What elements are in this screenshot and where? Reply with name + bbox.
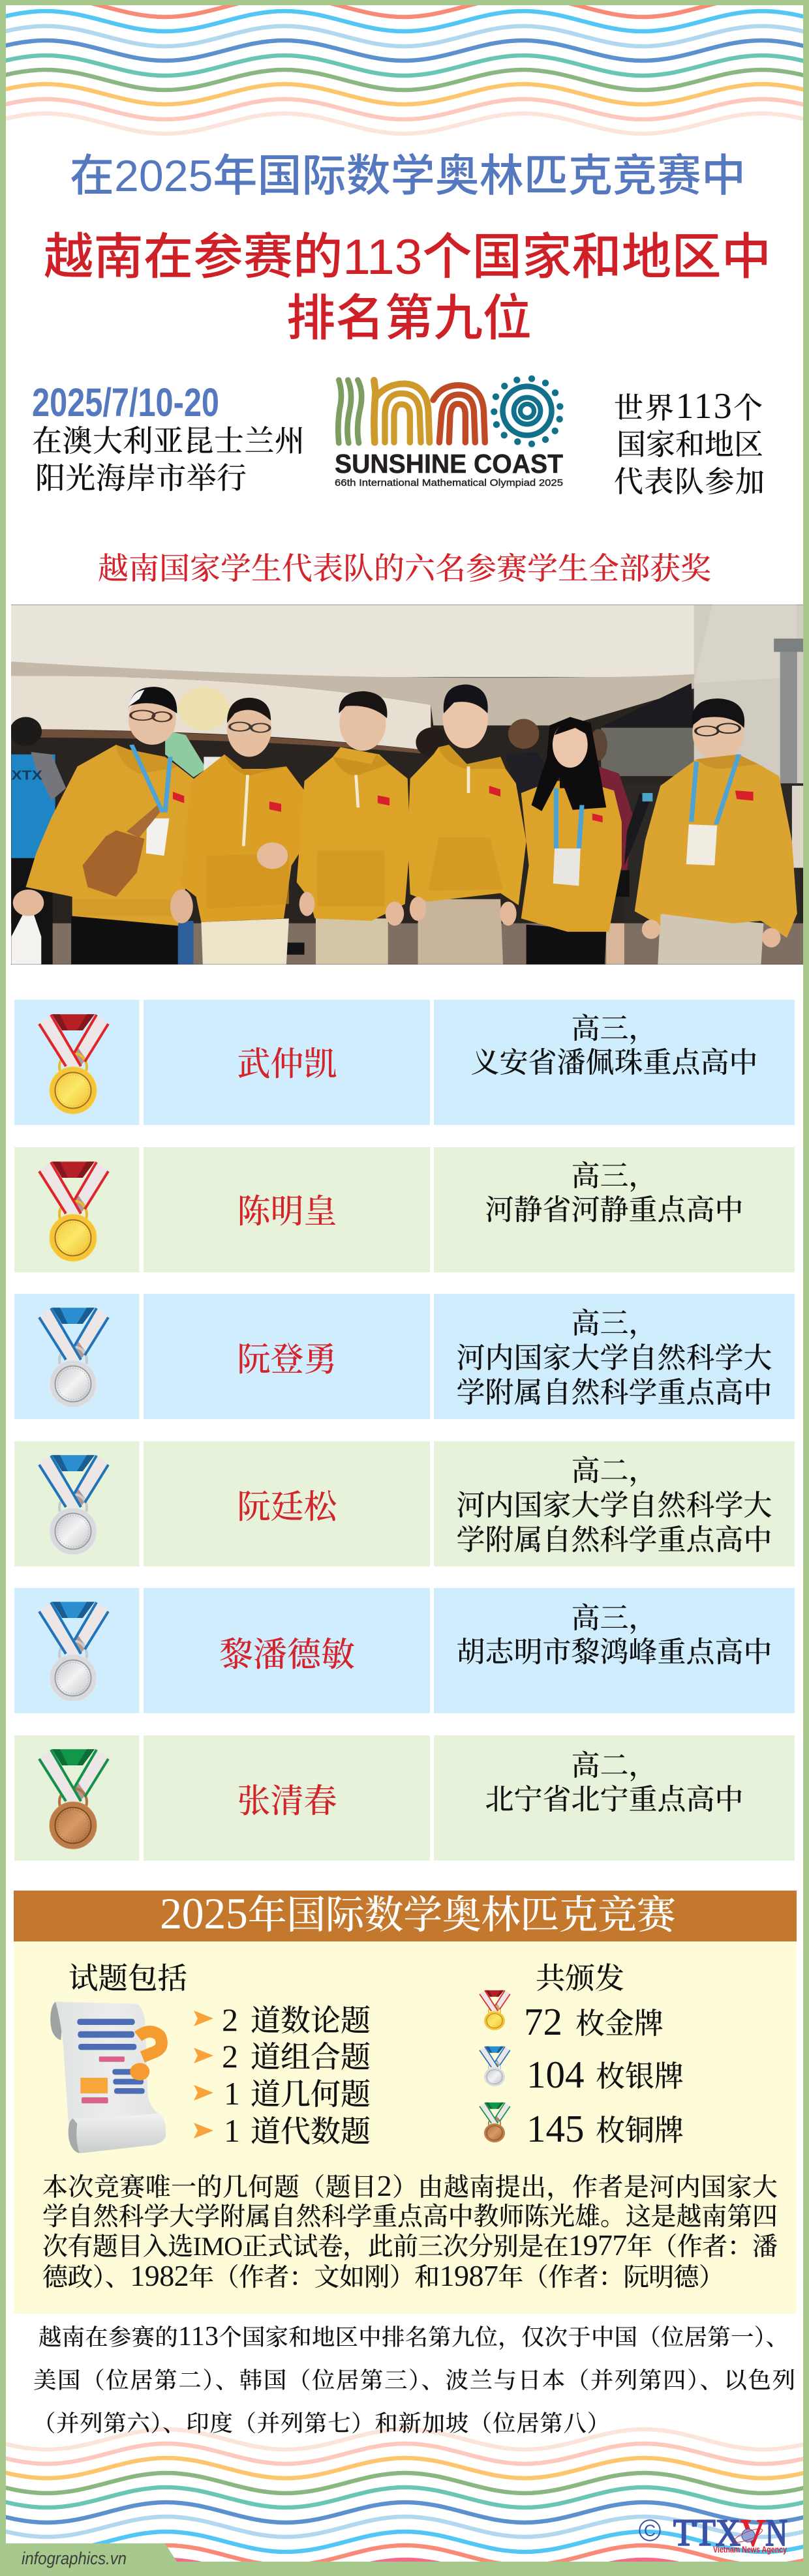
person 2 [181,698,307,965]
background people: XTX [11,768,42,783]
source tab [6,2543,177,2576]
list text: 1 [224,2075,240,2112]
background people [10,717,804,965]
question type list [194,2001,371,2149]
venue text: 在澳大利亚昆士兰州 [32,425,305,458]
student row 6 [14,1735,795,1861]
ranking text: 美国（位居第二）、韩国（位居第三）、波兰与日本（并列第四）、以色列 [33,2367,795,2393]
list text: 1 [224,2112,240,2149]
logo: TTXVN: Vietnam News Agency [713,2544,787,2554]
date: 2025/7/10-20 [32,380,219,425]
school: 高三， [572,1308,658,1340]
title line: red 1: 越南在参赛的113个国家和地区中 [44,230,771,285]
school: 高二， [572,1750,658,1782]
ranking text: 越南在参赛的113个国家和地区中排名第九位，仅次于中国（位居第一）、 [38,2322,789,2352]
title line: blue: 在2025年国际数学奥林匹克竞赛中 [70,151,746,201]
icon: silver medal [38,1455,109,1555]
subtitle: 越南国家学生代表队的六名参赛学生全部获奖 [98,552,711,586]
paragraph: 次有题目入选IMO正式试卷，此前三次分别是在1977年（作者：潘 [42,2228,778,2262]
list text: 道组合题 [251,2041,371,2074]
name: 阮廷松 [237,1490,338,1526]
logo: TTXVN: V [740,2511,765,2554]
school: 高二， [572,1455,658,1487]
school: 义安省潘佩珠重点高中 [471,1047,758,1079]
source tab: infographics.vn [22,2549,127,2568]
name: 阮登勇 [237,1342,337,1379]
icon: small gold medal [479,1990,510,2030]
school: 高三， [572,1013,658,1045]
arrow icons [194,2011,213,2138]
student row 4 [14,1441,795,1566]
icon: silver medal [38,1308,109,1407]
icon: small silver medal [479,2046,510,2086]
logo: TTXVN: N [765,2511,787,2554]
logo: IMO 2025 Sunshine Coast: SUNSHINE COAST [335,449,563,479]
name: 陈明皇 [237,1194,337,1231]
school: 学附属自然科学重点高中 [457,1524,772,1556]
medal count text: 104 [527,2053,585,2096]
icon: gold medal [38,1014,109,1114]
school: 河内国家大学自然科学大 [457,1342,772,1374]
paragraph: 德政）、1982年（作者：文如刚）和1987年（作者：阮明德） [42,2259,724,2292]
school: 河内国家大学自然科学大 [457,1490,772,1521]
medal count text: 145 [527,2107,585,2150]
logo: IMO 2025 Sunshine Coast [335,376,564,488]
icon: scroll with question mark [50,2001,166,2153]
top decorative waves [0,0,809,134]
name: 黎潘德敏 [219,1637,355,1674]
participants text: 国家和地区 [617,428,763,461]
medal count text: 72 [524,2000,562,2043]
school: 胡志明市黎鸿峰重点高中 [457,1636,772,1668]
name: 张清春 [237,1784,337,1820]
logo: TTXVN: C [644,2522,656,2540]
list text: 道数论题 [251,2004,371,2037]
icon: silver medal [38,1602,109,1701]
medal count text: 枚金牌 [575,2007,664,2040]
panel heading [14,1891,797,1941]
team photo [10,605,805,965]
list text: 2 [222,2038,238,2074]
paragraph: 学自然科学大学附属自然科学重点高中教师陈光雄。这是越南第四 [42,2203,778,2231]
school: 学附属自然科学重点高中 [457,1377,772,1409]
name: 武仲凯 [237,1047,337,1083]
panel heading text: 2025年国际数学奥林匹克竞赛 [160,1889,677,1938]
medal count text: 枚银牌 [596,2060,684,2093]
person 3 [297,691,410,965]
paragraph: 本次竞赛唯一的几何题（题目2）由越南提出，作者是河内国家大 [42,2169,778,2202]
school: 高三， [572,1602,658,1634]
logo: TTXVN: TTX [673,2511,740,2554]
list text: 道代数题 [251,2115,371,2148]
participants text: 代表队参加 [614,466,765,498]
person 1 [13,687,195,965]
person 6 [635,698,797,965]
ranking text: （并列第六）、印度（并列第七）和新加坡（位居第八） [33,2410,610,2436]
sub-heading: questions: 试题包括 [69,1962,187,1995]
title line: red 2: 排名第九位 [286,291,532,346]
school: 高三， [572,1160,658,1192]
icon: gold medal [38,1161,109,1261]
panel: 2025 IMO summary [14,1889,797,2314]
school: 河静省河静重点高中 [485,1194,744,1226]
medal counts [479,1990,684,2150]
logo: IMO 2025 Sunshine Coast: 66th International Mathematical Olympiad 2025 [335,477,563,488]
participants text: 世界113个 [614,386,763,427]
icon: small bronze medal [479,2103,510,2142]
person 4 [408,684,527,965]
student row 5 [14,1588,795,1713]
bottom decorative waves [0,2429,809,2576]
venue text: 阳光海岸市举行 [35,462,247,495]
student row 3 [14,1294,795,1419]
person 5 [521,717,622,965]
list text: 道几何题 [251,2078,371,2111]
icon: bronze medal [38,1749,109,1849]
date and venue [32,380,305,495]
title [44,151,771,346]
sub-heading: medals awarded: 共颁发 [536,1962,624,1995]
student row 1 [14,1000,795,1125]
medal count text: 枚铜牌 [596,2114,684,2147]
school: 北宁省北宁重点高中 [485,1784,744,1816]
list text: 2 [222,2001,238,2038]
logo: TTXVN [639,2511,787,2554]
student row 2 [14,1147,795,1272]
